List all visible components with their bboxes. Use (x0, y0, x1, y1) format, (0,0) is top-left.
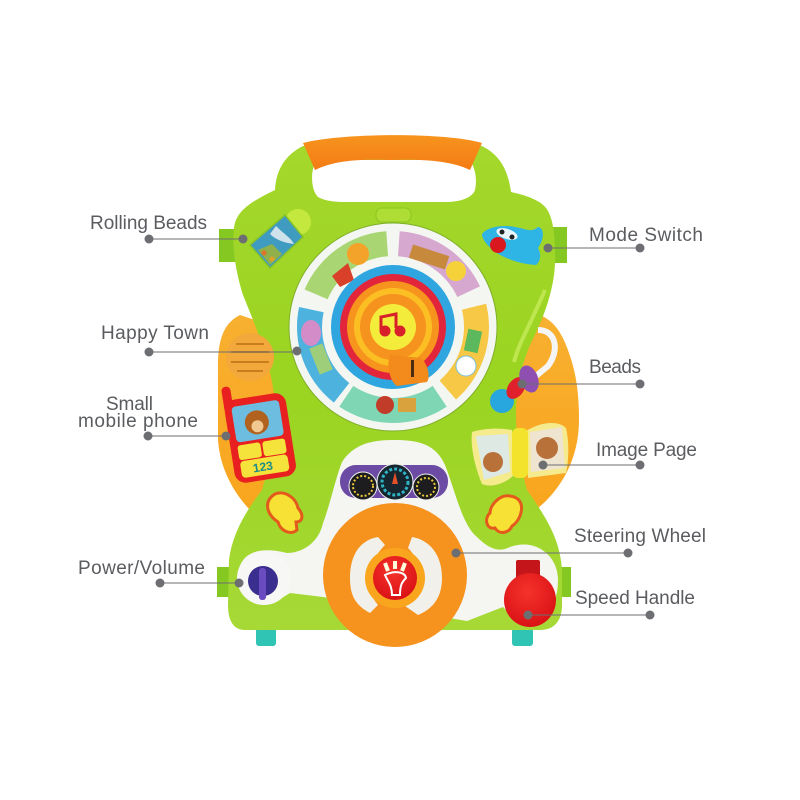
segment lilac (398, 231, 480, 297)
dashboard white panel (238, 440, 558, 625)
orange side panel right (510, 315, 579, 508)
dial pointer (388, 355, 429, 386)
label: Rolling Beads: Rolling Beads (90, 213, 207, 234)
label: Mode Switch: Mode Switch (589, 225, 703, 246)
dashboard gauges (340, 464, 448, 500)
segment yellow (440, 304, 489, 400)
speed handle (504, 560, 556, 627)
highlight strokes (514, 290, 545, 362)
power volume knob (237, 551, 291, 605)
label: Image Page: Image Page (596, 440, 697, 461)
green main body (228, 146, 562, 630)
happy town wheel (289, 223, 497, 431)
label: Power/Volume: Power/Volume (78, 558, 205, 579)
beads toy (490, 330, 555, 413)
mode switch whale (482, 226, 543, 265)
toy body (217, 135, 579, 647)
segment blue (297, 307, 349, 403)
center dial rings (331, 265, 455, 389)
label: Steering Wheel: Steering Wheel (574, 526, 706, 547)
segment teal (339, 386, 447, 423)
segment pictures (332, 263, 354, 287)
image page (472, 423, 568, 486)
side tabs (217, 227, 571, 597)
steering wheel (323, 503, 467, 647)
label: Small mobile phone: Small (106, 394, 153, 415)
button right (487, 496, 522, 532)
speaker (226, 333, 274, 381)
segment green house (305, 231, 388, 299)
handle notch (376, 208, 411, 222)
label: Speed Handle: Speed Handle (575, 588, 695, 609)
label: Small mobile phone (78, 394, 198, 432)
phone digits: 123 (252, 458, 274, 475)
label: Beads: Beads (589, 357, 641, 378)
callout lines and dots (144, 234, 654, 620)
label: Small mobile phone: mobile phone (78, 411, 198, 432)
music note icon (381, 314, 404, 335)
small mobile phone (221, 378, 298, 484)
feet (256, 628, 533, 646)
handle grip (303, 135, 482, 170)
orange side panel left (218, 315, 290, 512)
rolling beads (250, 209, 311, 268)
label: Happy Town: Happy Town (101, 323, 209, 344)
button left (268, 493, 302, 532)
